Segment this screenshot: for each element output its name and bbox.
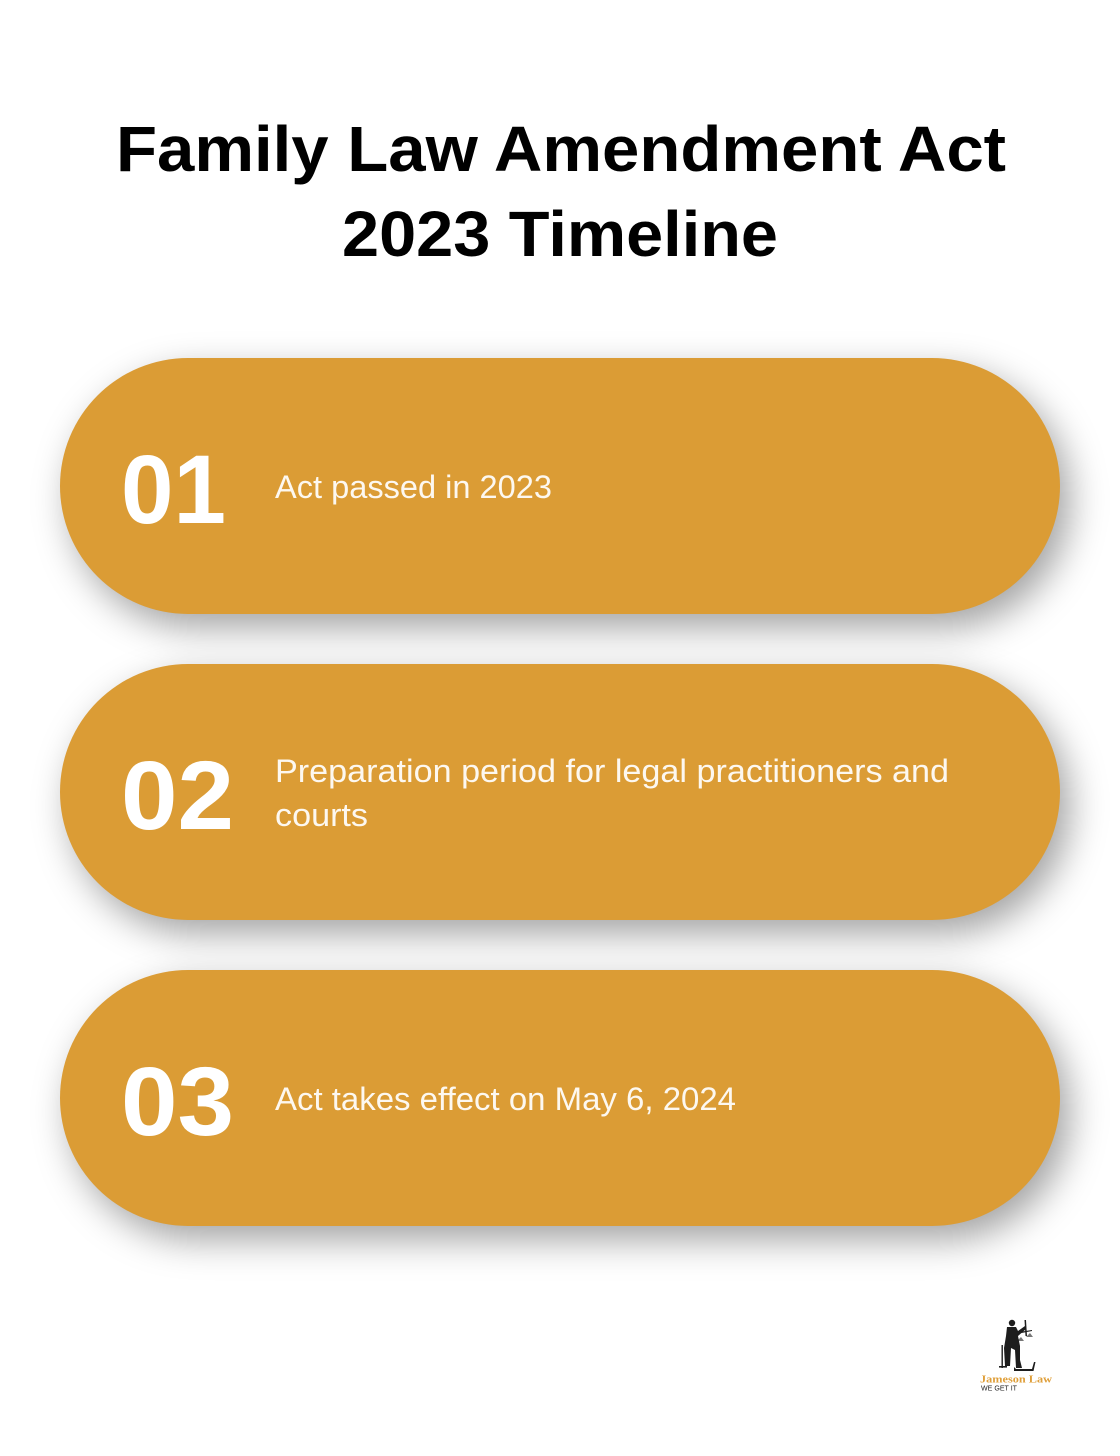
- logo: Jameson Law: [980, 1320, 1052, 1392]
- title: [116, 113, 1006, 270]
- panel: step 01: Act passed in 2023: [275, 469, 552, 505]
- panel: step 02: [60, 664, 1070, 934]
- title: Family Law Amendment Act: [116, 113, 1006, 185]
- panel: step 02: courts: [275, 797, 368, 833]
- logo: Jameson Law: WE GET IT: [981, 1386, 1018, 1392]
- panel: step 01: [60, 358, 1070, 628]
- panel: step 01: 01: [121, 435, 226, 544]
- title: 2023 Timeline: [342, 198, 778, 270]
- panel: step 02: Preparation period for legal practitioners and: [275, 753, 949, 789]
- icon: lady justice: [999, 1320, 1036, 1371]
- panel: step 03: [60, 970, 1070, 1240]
- panel: step 03: Act takes effect on May 6, 2024: [275, 1081, 736, 1117]
- panel: step 02: 02: [121, 741, 234, 850]
- logo: Jameson Law: Jameson Law: [980, 1374, 1052, 1386]
- panel: step 03: 03: [121, 1047, 234, 1156]
